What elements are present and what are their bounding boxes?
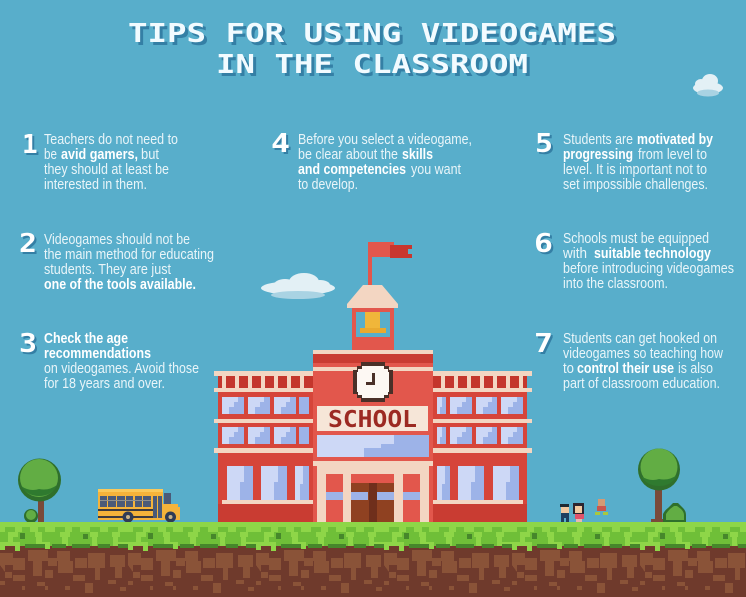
school building bbox=[214, 242, 532, 522]
number 4: 4 bbox=[271, 129, 290, 159]
tip 1 text: Teachers do not need to bbox=[44, 132, 178, 148]
tip 6 text: suitable technology bbox=[594, 246, 711, 262]
tip 7 text: videogames so teaching how bbox=[563, 346, 723, 362]
tip 5 text: Students are bbox=[563, 132, 633, 148]
child: jumping bbox=[595, 499, 608, 515]
tip 5 bbox=[535, 129, 713, 193]
tip 7 text: part of classroom education. bbox=[563, 376, 720, 392]
child: boy bbox=[560, 504, 569, 522]
tip 4 text: be clear about the bbox=[298, 147, 398, 163]
tip 4 bbox=[271, 129, 472, 193]
tip 1 text: but bbox=[141, 147, 159, 163]
tip 3 text: recommendations bbox=[44, 346, 151, 362]
tip 1 bbox=[22, 130, 178, 193]
school sign: SCHOOL bbox=[328, 407, 417, 433]
ground bbox=[0, 522, 746, 597]
tip 7 text: is also bbox=[678, 361, 713, 377]
tip 5 text: progressing bbox=[563, 147, 633, 163]
cloud top right bbox=[693, 74, 723, 96]
tip 7 text: control their use bbox=[577, 361, 674, 377]
tip 5 text: level. It is important not to bbox=[563, 162, 707, 178]
tip 7 bbox=[534, 329, 723, 392]
right tree bbox=[638, 448, 680, 522]
tip 1 text: they should at least be bbox=[44, 162, 169, 178]
tip 1 text bbox=[44, 132, 178, 193]
tip 7 text: Students can get hooked on bbox=[563, 331, 717, 347]
tip 3 text bbox=[44, 331, 199, 392]
tip 4 text: and competencies bbox=[298, 162, 406, 178]
number 2: 2 bbox=[19, 229, 37, 259]
number 1: 1 bbox=[22, 130, 38, 160]
central block bbox=[313, 350, 433, 522]
tip 2 text: the main method for educating bbox=[44, 247, 214, 263]
tip 4 text bbox=[298, 132, 472, 193]
tip 2 text bbox=[44, 232, 214, 293]
tip 4 text: to develop. bbox=[298, 177, 358, 193]
right wing bbox=[433, 371, 532, 522]
entrance bbox=[317, 466, 429, 522]
tip 1 text: avid gamers, bbox=[61, 147, 138, 163]
title: IN THE CLASSROOM bbox=[216, 50, 528, 80]
tip 1 text: be bbox=[44, 147, 57, 163]
tip 2 text: one of the tools available. bbox=[44, 277, 196, 293]
left tree bbox=[18, 458, 61, 522]
tip 6 bbox=[534, 229, 734, 292]
tip 3 bbox=[19, 329, 199, 392]
tip 3 text: for 18 years and over. bbox=[44, 376, 165, 392]
left bush bbox=[24, 509, 38, 523]
cloud center bbox=[261, 273, 335, 299]
clock bbox=[353, 362, 393, 402]
tip 5 text: motivated by bbox=[637, 132, 713, 148]
number 5: 5 bbox=[535, 129, 553, 159]
tip 4 text: Before you select a videogame, bbox=[298, 132, 472, 148]
tip 5 text bbox=[563, 132, 713, 193]
tip 6 text: with bbox=[562, 246, 587, 262]
bell bbox=[360, 312, 386, 333]
number 7: 7 bbox=[534, 329, 553, 359]
tip 3 text: on videogames. Avoid those bbox=[44, 361, 199, 377]
tip 3 text: Check the age bbox=[44, 331, 128, 347]
title: TIPS FOR USING VIDEOGAMES bbox=[128, 19, 616, 49]
child: girl bbox=[573, 503, 584, 522]
title bbox=[128, 19, 616, 80]
right bush bbox=[663, 503, 686, 522]
tip 7 text bbox=[563, 331, 723, 392]
tip 4 text: you want bbox=[411, 162, 461, 178]
left wing bbox=[214, 371, 313, 522]
center window bbox=[317, 435, 429, 457]
bus wheels bbox=[122, 512, 176, 522]
tip 6 text bbox=[562, 231, 734, 292]
tip 4 text: skills bbox=[402, 147, 433, 163]
bell tower bbox=[347, 285, 398, 351]
number 6: 6 bbox=[534, 229, 553, 259]
tip 5 text: from level to bbox=[638, 147, 707, 163]
tip 6 text: Schools must be equipped bbox=[563, 231, 709, 247]
tip 2 bbox=[19, 229, 214, 293]
tip 1 text: interested in them. bbox=[44, 177, 147, 193]
tip 5 text: set impossible challenges. bbox=[563, 177, 708, 193]
flag bbox=[368, 242, 412, 286]
school bus bbox=[98, 489, 180, 522]
number 3: 3 bbox=[19, 329, 37, 359]
tip 6 text: into the classroom. bbox=[563, 276, 668, 292]
tip 7 text: to bbox=[563, 361, 574, 377]
tip 2 text: Videogames should not be bbox=[44, 232, 190, 248]
tip 2 text: students. They are just bbox=[44, 262, 171, 278]
